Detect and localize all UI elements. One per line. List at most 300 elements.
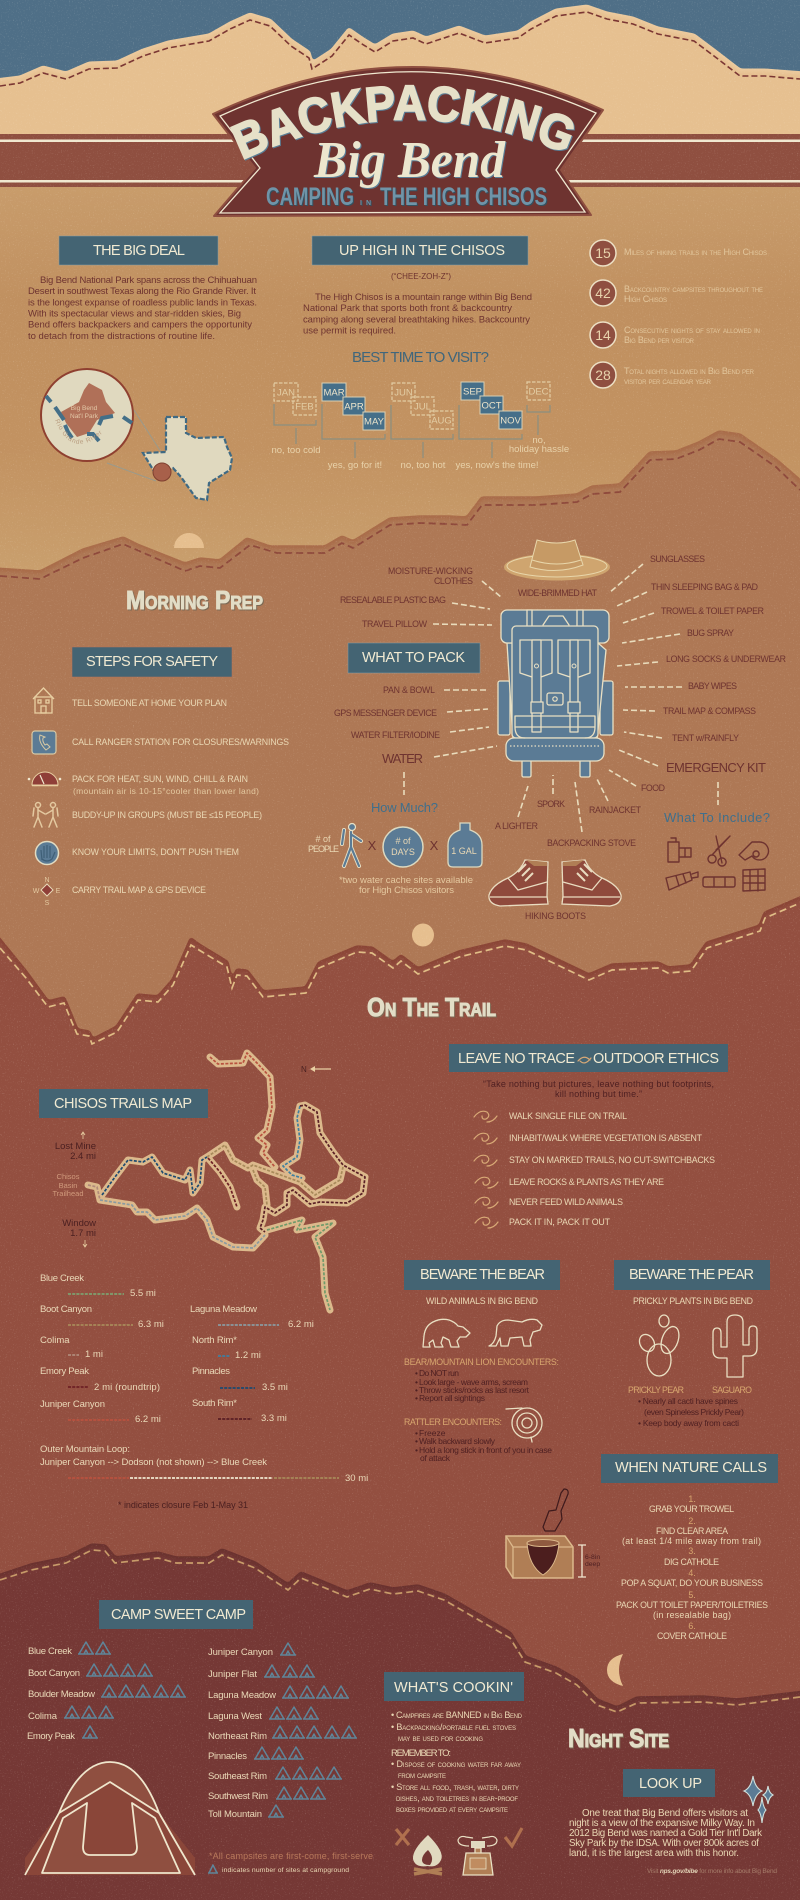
list: campgrounds left: Boulder Meadow bbox=[28, 1689, 95, 1700]
icon: coiled rattlesnake bbox=[506, 1408, 542, 1442]
icon: gallon jug bbox=[448, 823, 482, 867]
cactus names bbox=[628, 1385, 752, 1395]
list: cathole steps bbox=[616, 1494, 768, 1641]
item labels: bottom: EMERGENCY KIT bbox=[666, 760, 766, 775]
chart: month calendar: no, bbox=[532, 435, 546, 446]
icon: stars bbox=[744, 1776, 773, 1823]
chart: month calendar: yes, go for it! bbox=[328, 460, 382, 471]
stat: 14 nights bbox=[590, 322, 760, 348]
item labels: bottom: WATER bbox=[382, 751, 423, 766]
background: on the trail mountains bbox=[0, 896, 800, 1720]
item labels: bottom: RAINJACKET bbox=[589, 805, 642, 815]
text block: milky way bbox=[569, 1808, 762, 1859]
moon over the trail ridge bbox=[412, 924, 434, 946]
icon: campfire bbox=[413, 1835, 442, 1874]
heading: look up: LOOK UP bbox=[639, 1776, 702, 1792]
list: rattler encounters: of attack bbox=[420, 1453, 451, 1463]
stat: 14 nights: 14 bbox=[595, 327, 611, 343]
heading: chisos trails map bbox=[39, 1089, 208, 1118]
icon: check mark bbox=[505, 1828, 522, 1846]
list: cactus tips bbox=[638, 1396, 744, 1428]
step: buddy up: BUDDY-UP IN GROUPS (MUST BE ≤15 PEOPLE) bbox=[72, 810, 262, 820]
list: bear encounters: • bbox=[415, 1377, 418, 1387]
list: cooking rules: may be used for cooking bbox=[398, 1733, 483, 1743]
map labels: Chisos bbox=[57, 1172, 80, 1181]
step: carry map: CARRY TRAIL MAP & GPS DEVICE bbox=[72, 885, 206, 895]
list: cooking rules: REMEMBER TO: bbox=[391, 1748, 451, 1759]
list: cooking rules bbox=[391, 1710, 523, 1814]
list: rattler encounters: • bbox=[415, 1445, 418, 1455]
icon: large tent bbox=[25, 1762, 195, 1875]
heading: the big deal: THE BIG DEAL bbox=[93, 243, 185, 259]
list: rattler encounters: Freeze bbox=[419, 1428, 446, 1438]
text block: park description: Desert in southwest Texas along the Rio Grande River. It bbox=[28, 286, 256, 297]
map labels: Basin bbox=[59, 1181, 77, 1190]
panel: up high in the chisos bbox=[271, 236, 569, 471]
stat: 42 campsites: Backcountry campsites throughout the bbox=[624, 284, 763, 294]
list: cooking rules: from campsite bbox=[398, 1770, 446, 1780]
panel: beware the bear bbox=[404, 1260, 560, 1463]
list: cathole steps: DIG CATHOLE bbox=[664, 1557, 719, 1567]
step: know your limits: KNOW YOUR LIMITS, DON'T PUSH THEM bbox=[72, 847, 239, 857]
step: tell someone: TELL SOMEONE AT HOME YOUR PLAN bbox=[72, 698, 227, 708]
icon: saguaro bbox=[713, 1315, 757, 1377]
list: ethics: STAY ON MARKED TRAILS, NO CUT-SWITCHBACKS bbox=[509, 1155, 715, 1165]
list: campgrounds right: Northeast Rim bbox=[208, 1731, 267, 1742]
item labels: top and right side: SUNGLASSES bbox=[650, 554, 705, 564]
heading: beware the bear: BEWARE THE BEAR bbox=[420, 1267, 545, 1283]
text block: milky way: 2012 Big Bend was named a Gold Tier Int'l Dark bbox=[569, 1828, 762, 1839]
list: campgrounds left: Boot Canyon bbox=[28, 1668, 80, 1679]
panel: steps for safety bbox=[28, 647, 289, 907]
panel: look up bbox=[569, 1769, 777, 1875]
list: cooking rules: • Backpacking/portable fuel stoves bbox=[391, 1722, 516, 1732]
list: cathole steps: COVER CATHOLE bbox=[657, 1631, 727, 1641]
heading: when nature calls bbox=[601, 1454, 778, 1483]
list: cathole steps: POP A SQUAT, DO YOUR BUSINESS bbox=[621, 1578, 763, 1588]
heading: look up bbox=[623, 1769, 715, 1797]
legend: trail lengths: South Rim* bbox=[192, 1398, 237, 1409]
pictogram: campsite counts bbox=[64, 1642, 357, 1817]
map: big bend inset and texas: Big Bend bbox=[71, 405, 98, 412]
item labels: top and right side: TROWEL & TOILET PAPER bbox=[661, 606, 764, 616]
panel: beware the pear bbox=[614, 1260, 770, 1428]
legend: trail lengths: Juniper Canyon bbox=[40, 1399, 105, 1410]
legend: trail lengths: 3.3 mi bbox=[261, 1413, 287, 1424]
map labels bbox=[52, 1132, 96, 1247]
list: campgrounds right: Toll Mountain bbox=[208, 1809, 262, 1820]
legend: trail lengths: 1.2 mi bbox=[235, 1350, 261, 1361]
text block: chisos description: The High Chisos is a mountain range within Big Bend bbox=[315, 292, 532, 303]
legend: trail lengths: Outer Mountain Loop: bbox=[40, 1444, 130, 1455]
icon: pill pack bbox=[743, 869, 765, 891]
chart: month calendar: OCT bbox=[481, 400, 502, 412]
panel: what to pack bbox=[308, 540, 786, 921]
list: campgrounds left: Emory Peak bbox=[27, 1731, 75, 1742]
stat: 42 campsites bbox=[590, 280, 763, 306]
heading: up high in the chisos: UP HIGH IN THE CHISOS bbox=[339, 243, 505, 259]
map labels: 1.7 mi bbox=[70, 1228, 96, 1239]
quote bbox=[483, 1079, 714, 1099]
chart: month calendar: yes, now's the time! bbox=[455, 460, 539, 471]
list: campgrounds right: Southeast Rim bbox=[208, 1771, 267, 1782]
heading: beware the pear: BEWARE THE PEAR bbox=[629, 1267, 754, 1283]
water footnote bbox=[339, 875, 473, 896]
icon: scissors bbox=[708, 836, 730, 866]
item labels: bottom: BACKPACKING STOVE bbox=[547, 838, 636, 848]
stat: 42 campsites: High Chisos bbox=[624, 294, 667, 304]
background: morning prep mountains bbox=[0, 432, 800, 1060]
item labels: bottom: FOOD bbox=[641, 783, 665, 793]
legend: trail lengths: North Rim* bbox=[192, 1335, 237, 1346]
heading: what to pack: WHAT TO PACK bbox=[362, 650, 465, 666]
list: cathole steps: 3. bbox=[688, 1546, 696, 1556]
legend: trail lengths: 6.2 mi bbox=[135, 1414, 161, 1425]
icon: compass: N bbox=[44, 877, 50, 884]
map: big bend inset and texas: Rio Grande River bbox=[55, 419, 102, 444]
chart: month calendar: holiday hassle bbox=[509, 444, 569, 455]
icon: compass: S bbox=[45, 900, 50, 907]
icon: mountain lion bbox=[489, 1319, 542, 1346]
list: rattler encounters: Hold a long stick in front of you in case bbox=[419, 1445, 552, 1455]
heading: leave no trace outdoor ethics: LEAVE NO TRACE bbox=[458, 1051, 575, 1067]
list: cathole steps: 4. bbox=[688, 1568, 696, 1578]
chart: trail map bbox=[88, 1053, 365, 1310]
stat: 42 campsites: 42 bbox=[595, 285, 611, 301]
item labels: top and right side: TENT w/RAINFLY bbox=[672, 733, 739, 743]
heading: what's cookin: WHAT'S COOKIN' bbox=[394, 1680, 513, 1696]
legend: trail lengths: Pinnacles bbox=[192, 1366, 230, 1377]
map labels: Trailhead bbox=[52, 1189, 84, 1198]
text block: park description: Big Bend National Park spans across the Chihuahuan bbox=[40, 275, 257, 286]
multiply sign: X bbox=[368, 838, 377, 853]
list: campgrounds right bbox=[208, 1647, 276, 1820]
icon: ointment tube bbox=[666, 872, 698, 890]
days count: DAYS bbox=[391, 847, 415, 857]
quote: “Take nothing but pictures, leave nothing but footprints, bbox=[483, 1079, 714, 1089]
text block: park description: is the longest expanse of roadless public lands in Texas. bbox=[28, 298, 257, 308]
item labels: bottom: HIKING BOOTS bbox=[525, 911, 586, 921]
item labels: top and right side bbox=[518, 554, 786, 743]
legend: trail lengths: 1 mi bbox=[85, 1349, 103, 1360]
list: cathole steps: (at least 1/4 mile away from trail) bbox=[622, 1536, 761, 1546]
text block: milky way: land, it is the largest area with this honor. bbox=[569, 1848, 739, 1859]
icon: camp stove bbox=[458, 1836, 497, 1875]
heading: steps for safety: STEPS FOR SAFETY bbox=[86, 654, 218, 670]
legend: trail lengths: Blue Creek bbox=[40, 1273, 84, 1284]
icon: house bbox=[33, 688, 54, 713]
map labels: 2.4 mi bbox=[70, 1151, 96, 1162]
heading: best time to visit: BEST TIME TO VISIT? bbox=[352, 349, 489, 366]
panel: the big deal bbox=[28, 236, 257, 502]
list: campgrounds left: Blue Creek bbox=[28, 1646, 72, 1657]
title banner bbox=[212, 66, 604, 217]
chart: month calendar: no, too hot bbox=[401, 460, 446, 471]
chart: month calendar: MAY bbox=[364, 416, 385, 428]
icon: whistle bbox=[739, 842, 768, 860]
map: big bend inset and texas: Nat'l Park bbox=[70, 413, 99, 420]
heading: leave no trace outdoor ethics: OUTDOOR ETHICS bbox=[593, 1051, 719, 1067]
list: cathole steps: GRAB YOUR TROWEL bbox=[649, 1504, 734, 1514]
legend: trail lengths bbox=[40, 1273, 368, 1484]
list: cathole steps: 5. bbox=[688, 1590, 696, 1600]
list: rattler encounters: Walk backward slowly bbox=[419, 1436, 496, 1446]
heading: chisos trails map: CHISOS TRAILS MAP bbox=[54, 1096, 192, 1112]
stat: 28 nights: visitor per calendar year bbox=[624, 376, 712, 386]
list: bear encounters: • bbox=[415, 1368, 418, 1378]
crescent moon bbox=[607, 1654, 623, 1686]
cactus names: SAGUARO bbox=[712, 1385, 752, 1395]
section title: morning prep: Morning Prep bbox=[126, 585, 263, 615]
chart: month calendar: FEB bbox=[295, 402, 314, 412]
icon: stop hand bbox=[36, 842, 58, 864]
panel: camp sweet camp bbox=[25, 1600, 373, 1875]
list: cathole steps: FIND CLEAR AREA bbox=[656, 1526, 728, 1536]
item labels: bottom bbox=[382, 751, 766, 921]
subtitle: IN bbox=[360, 200, 371, 207]
list: bear encounters: BEAR/MOUNTAIN LION ENCOUNTERS: bbox=[404, 1357, 559, 1367]
item labels: top and right side: TRAIL MAP & COMPASS bbox=[663, 706, 756, 716]
icon: hiking boots bbox=[489, 860, 621, 906]
north arrow bbox=[301, 1065, 331, 1074]
list: cooking rules: dishes, and toiletries in bear-proof bbox=[396, 1793, 518, 1803]
list: cathole steps: PACK OUT TOILET PAPER/TOILETRIES bbox=[616, 1600, 768, 1610]
background: night camp mountains bbox=[0, 1545, 800, 1900]
stat: 15 miles: 15 bbox=[595, 245, 611, 261]
legend: trail lengths: Laguna Meadow bbox=[190, 1304, 257, 1315]
list: bear encounters: • bbox=[415, 1385, 418, 1395]
item labels: bottom: SPORK bbox=[537, 799, 565, 809]
list: campgrounds left: Colima bbox=[28, 1711, 58, 1722]
icon: weather gauge bbox=[28, 772, 61, 786]
chart: month calendar: JUL bbox=[414, 402, 431, 412]
stat: 28 nights: Total nights allowed in Big Bend per bbox=[624, 366, 755, 376]
stat: 14 nights: Big Bend per visitor bbox=[624, 335, 695, 345]
item labels: bottom: A LIGHTER bbox=[495, 821, 538, 831]
list: rattler encounters: • bbox=[415, 1428, 418, 1438]
icon: flashlight bbox=[668, 838, 691, 862]
heading: camp sweet camp: CAMP SWEET CAMP bbox=[111, 1607, 246, 1623]
panel: key stats bbox=[590, 240, 767, 388]
stat: 28 nights: 28 bbox=[595, 367, 611, 383]
legend: trail lengths: 5.5 mi bbox=[130, 1288, 156, 1299]
water footnote: for High Chisos visitors bbox=[359, 885, 454, 896]
list: rattler encounters: • bbox=[415, 1436, 418, 1446]
list: campgrounds left bbox=[27, 1646, 95, 1742]
list: cooking rules: • Store all food, trash, water, dirty bbox=[391, 1782, 519, 1792]
icon: two hikers bbox=[33, 802, 58, 827]
list: cooking rules: • Campfires are BANNED in Big Bend bbox=[391, 1710, 523, 1720]
heading: what's cookin bbox=[384, 1672, 524, 1701]
chart: month calendar bbox=[271, 382, 569, 471]
chart: month calendar: JUN bbox=[394, 388, 413, 398]
list: ethics: PACK IT IN, PACK IT OUT bbox=[509, 1217, 611, 1227]
map: big bend inset and texas bbox=[40, 368, 233, 502]
list: ethics: LEAVE ROCKS & PLANTS AS THEY ARE bbox=[509, 1177, 664, 1187]
subtitle: THE HIGH CHISOS bbox=[380, 183, 547, 211]
diagram: cathole: deep bbox=[585, 1561, 600, 1568]
item labels: top and right side: WIDE-BRIMMED HAT bbox=[518, 588, 598, 598]
item labels: top and right side: BABY WIPES bbox=[688, 681, 737, 691]
days count bbox=[383, 827, 423, 867]
item labels: top and right side: LONG SOCKS & UNDERWEAR bbox=[666, 654, 786, 664]
legend: trail lengths: Juniper Canyon --> Dodson (not shown) --> Blue Creek bbox=[40, 1457, 267, 1468]
list: campgrounds right: Southwest Rim bbox=[208, 1791, 268, 1802]
background: sand ridge bbox=[0, 6, 800, 145]
sun rising bbox=[174, 533, 204, 548]
campsite notes: indicates number of sites at campground bbox=[222, 1867, 349, 1874]
stat: 28 nights bbox=[590, 362, 755, 388]
heading: beware the pear bbox=[614, 1260, 770, 1290]
icon: backpack bbox=[498, 610, 613, 777]
chart: month calendar: DEC bbox=[528, 386, 549, 398]
banner stripe bbox=[0, 134, 800, 187]
people count: # of bbox=[315, 834, 331, 844]
item labels: left side: GPS MESSENGER DEVICE bbox=[334, 708, 437, 718]
item labels: left side: WATER FILTER/IODINE bbox=[351, 730, 440, 740]
icon: prickly pear bbox=[636, 1315, 682, 1376]
closure note: * indicates closure Feb 1-May 31 bbox=[118, 1500, 248, 1510]
icon: phone bbox=[32, 731, 56, 754]
diagram: cathole: 6-8in bbox=[585, 1554, 600, 1561]
list: cathole steps: (in resealable bag) bbox=[653, 1610, 731, 1620]
legend: trail lengths: Emory Peak bbox=[40, 1366, 89, 1377]
legend: trail lengths: 30 mi bbox=[345, 1473, 368, 1484]
step: pack for weather: (mountain air is 10-15°cooler than lower land) bbox=[73, 786, 259, 796]
text block: chisos description: camping along several breathtaking hikes. Backcountry bbox=[303, 314, 530, 326]
text block: chisos description: use permit is required. bbox=[303, 326, 396, 336]
list: cathole steps: 6. bbox=[688, 1621, 696, 1631]
icon: compass: E bbox=[56, 888, 61, 895]
legend: trail lengths: Boot Canyon bbox=[40, 1304, 92, 1315]
stat: 15 miles bbox=[590, 240, 767, 266]
item labels: left side: PAN & BOWL bbox=[383, 685, 435, 695]
leader lines bbox=[404, 564, 718, 832]
text block: park description: Bend offers backpackers and campers the opportunity bbox=[28, 320, 252, 330]
emergency kit bbox=[664, 810, 770, 891]
list: ethics: INHABIT/WALK WHERE VEGETATION IS ABSENT bbox=[509, 1133, 703, 1143]
text block: milky way: One treat that Big Bend offers visitors at bbox=[582, 1808, 748, 1819]
map labels: Lost Mine bbox=[55, 1141, 96, 1152]
subtitle: CAMPING bbox=[266, 183, 354, 211]
list: campgrounds right: Laguna Meadow bbox=[208, 1690, 276, 1701]
list: bear encounters: Look large - wave arms, scream bbox=[419, 1377, 528, 1387]
title banner: BACKPACKING bbox=[230, 84, 575, 161]
heading: beware the bear bbox=[404, 1260, 560, 1290]
icon: bandage bbox=[703, 877, 735, 887]
item labels: left side bbox=[334, 566, 473, 740]
diagram: cathole bbox=[506, 1536, 600, 1578]
heading: how much: How Much? bbox=[371, 800, 438, 815]
list: campgrounds right: Juniper Flat bbox=[208, 1669, 257, 1680]
list: rattler encounters: RATTLER ENCOUNTERS: bbox=[404, 1417, 502, 1427]
heading: steps for safety bbox=[72, 647, 232, 677]
item labels: left side: CLOTHES bbox=[434, 576, 473, 586]
list: cactus tips: • Nearly all cacti have spines bbox=[638, 1396, 738, 1406]
cactus names: PRICKLY PEAR bbox=[628, 1385, 684, 1395]
multiply sign: X bbox=[430, 838, 439, 853]
heading: the big deal bbox=[59, 236, 218, 265]
text block: chisos description bbox=[303, 292, 532, 336]
panel: leave no trace bbox=[449, 1044, 728, 1228]
campsite notes bbox=[208, 1851, 373, 1874]
subtitle bbox=[266, 183, 547, 211]
people count: PEOPLE bbox=[308, 844, 339, 854]
chart: month calendar: AUG bbox=[431, 416, 452, 426]
chart: month calendar: APR bbox=[344, 402, 364, 412]
icon: wide-brimmed hat bbox=[504, 540, 610, 580]
title: big bend: Big Bend bbox=[313, 132, 506, 189]
list: bear encounters: Do NOT run bbox=[419, 1368, 459, 1378]
heading: up high in the chisos bbox=[312, 236, 528, 265]
list: campgrounds right: Juniper Canyon bbox=[208, 1647, 273, 1658]
list: cactus tips: (even Spineless Prickly Pear) bbox=[644, 1407, 744, 1417]
legend: trail lengths: 6.3 mi bbox=[138, 1319, 164, 1330]
step: pack for weather: PACK FOR HEAT, SUN, WIND, CHILL & RAIN bbox=[72, 774, 248, 784]
icon: trowel bbox=[543, 1489, 568, 1531]
list: bear encounters: • bbox=[415, 1393, 418, 1403]
list: bear encounters bbox=[404, 1357, 559, 1403]
legend: trail lengths: Colima bbox=[40, 1335, 70, 1346]
item labels: left side: TRAVEL PILLOW bbox=[362, 619, 428, 629]
section title: on the trail: On The Trail bbox=[367, 992, 496, 1022]
list: rattler encounters bbox=[404, 1417, 552, 1463]
list: bear encounters: Throw sticks/rocks as last resort bbox=[419, 1385, 530, 1395]
text block: milky way: night is a view of the expansive Milky Way. In bbox=[569, 1818, 755, 1829]
subheading: prickly plants: PRICKLY PLANTS IN BIG BEND bbox=[633, 1296, 753, 1306]
list: campgrounds right: Pinnacles bbox=[208, 1751, 247, 1762]
panel: chisos trails map bbox=[39, 1053, 368, 1510]
chart: month calendar: no, too cold bbox=[271, 445, 321, 456]
panel: when nature calls bbox=[506, 1454, 778, 1641]
list: cathole steps: 2. bbox=[688, 1516, 696, 1526]
icon: x mark bbox=[396, 1829, 409, 1845]
text block: milky way: Sky Park by the IDSA. With over 800k acres of bbox=[569, 1838, 759, 1849]
step: call ranger: CALL RANGER STATION FOR CLOSURES/WARNINGS bbox=[72, 737, 289, 747]
item labels: left side: MOISTURE-WICKING bbox=[388, 566, 473, 576]
heading: what to include: What To Include? bbox=[664, 810, 770, 825]
list: ethics: NEVER FEED WILD ANIMALS bbox=[509, 1197, 623, 1207]
icon: bear bbox=[423, 1319, 470, 1347]
north arrow: N bbox=[301, 1065, 307, 1074]
days count: # of bbox=[395, 836, 411, 846]
list: campgrounds right: Laguna West bbox=[208, 1711, 262, 1722]
background: tan ground bbox=[0, 134, 800, 604]
quote: kill nothing but time.” bbox=[555, 1089, 642, 1099]
text block: park description: With its spectacular views and star-ridden skies, Big bbox=[28, 308, 241, 320]
list: cactus tips: • Keep body away from cacti bbox=[638, 1418, 739, 1428]
step: pack for weather bbox=[72, 774, 259, 796]
section title: night site: Night Site bbox=[568, 1723, 669, 1753]
campsite notes: *All campsites are first-come, first-serve bbox=[209, 1851, 373, 1861]
pronunciation: (“CHEE-ZOH-Z”) bbox=[391, 272, 451, 281]
chart: month calendar: SEP bbox=[463, 386, 482, 398]
stat: 15 miles: Miles of hiking trails in the High Chisos bbox=[624, 247, 767, 257]
legend: trail lengths: 3.5 mi bbox=[262, 1382, 288, 1393]
title: backpacking bbox=[242, 119, 576, 160]
heading: camp sweet camp bbox=[99, 1600, 253, 1629]
text block: park description: to detach from the distractions of routine life. bbox=[28, 331, 215, 342]
panel: what's cookin bbox=[384, 1672, 524, 1875]
list: bear encounters: Report all sightings bbox=[419, 1393, 485, 1403]
chart: month calendar: MAR bbox=[323, 388, 345, 398]
water calculation bbox=[308, 800, 482, 896]
legend: trail lengths: 2 mi (roundtrip) bbox=[94, 1382, 160, 1393]
heading: what to pack bbox=[348, 643, 480, 673]
item labels: left side: RESEALABLE PLASTIC BAG bbox=[340, 595, 446, 605]
background: sky bbox=[0, 0, 800, 140]
people count bbox=[308, 824, 361, 866]
